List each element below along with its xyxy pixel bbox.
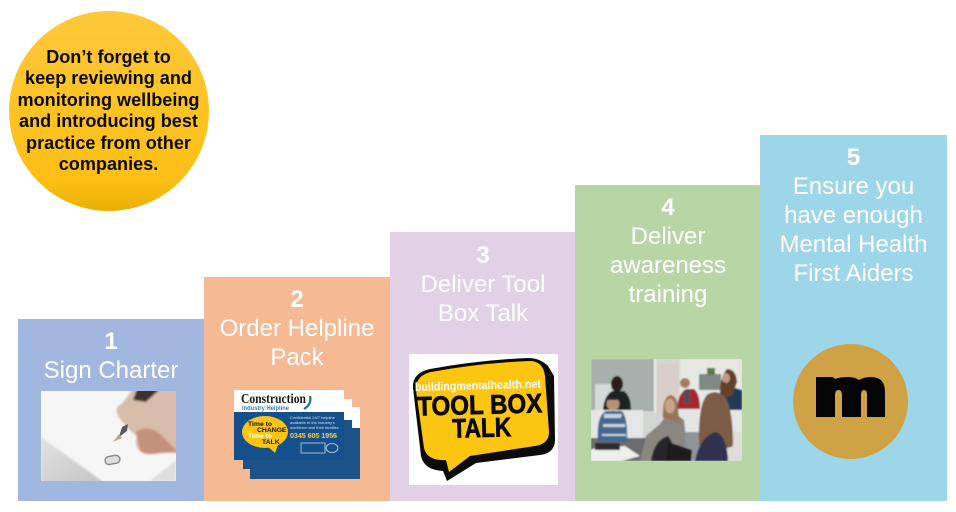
step 4 heading: Deliver bbox=[631, 223, 705, 250]
image: helpline cards: TALK bbox=[262, 439, 280, 446]
man in red bbox=[677, 389, 700, 409]
step 5 heading: have enough bbox=[784, 202, 923, 229]
woman in navy bbox=[724, 387, 742, 411]
image: helpline cards: Time to bbox=[248, 421, 272, 428]
step 5 heading: Ensure you bbox=[793, 173, 914, 200]
step 5 heading: 5 bbox=[847, 144, 860, 171]
panel: step 2 order helpline pack bbox=[204, 277, 390, 501]
step 4 heading bbox=[610, 194, 726, 308]
step 2 heading: Order Helpline bbox=[220, 315, 374, 342]
image: tool box talk speech bubble: TOOL BOX bbox=[417, 388, 543, 422]
image: helpline cards: 0345 605 1956 bbox=[290, 431, 337, 440]
step 4 heading: awareness bbox=[610, 252, 726, 279]
callout: keep reviewing circle: and introducing best bbox=[19, 111, 198, 131]
callout: keep reviewing circle: keep reviewing and bbox=[25, 68, 192, 88]
step 5 heading bbox=[779, 144, 928, 287]
woman in grey cardigan bbox=[640, 414, 685, 461]
step 1 heading: Sign Charter bbox=[44, 357, 178, 384]
step 2 heading: Pack bbox=[270, 344, 325, 371]
notebook bbox=[666, 442, 692, 461]
image: helpline cards: available to the industry's bbox=[290, 420, 335, 425]
image: tool box talk speech bubble: buildingmentalhealth.net bbox=[415, 377, 541, 394]
step 1 heading bbox=[44, 328, 178, 384]
man in plaid bbox=[598, 411, 627, 442]
image: hand signing document bbox=[41, 389, 178, 484]
step 3 heading: Deliver Tool bbox=[421, 271, 545, 298]
image: helpline cards: Industry Helpline bbox=[242, 405, 289, 412]
callout: keep reviewing circle: monitoring wellbeing bbox=[18, 90, 199, 110]
step 1 heading: 1 bbox=[104, 328, 118, 355]
step 2 heading: 2 bbox=[290, 286, 304, 313]
step 4 heading: training bbox=[629, 281, 707, 308]
callout: keep reviewing circle: Don’t forget to bbox=[46, 47, 171, 67]
callout: keep reviewing circle: companies. bbox=[59, 154, 158, 174]
step 2 heading bbox=[220, 286, 374, 371]
papers and laptop bbox=[591, 446, 640, 461]
step 3 heading: Box Talk bbox=[438, 300, 529, 327]
image: helpline cards: Construction bbox=[241, 391, 306, 406]
image: helpline cards: workforce and their families bbox=[290, 425, 339, 430]
woman with long hair bbox=[699, 392, 733, 450]
step 5 heading: Mental Health bbox=[779, 231, 928, 258]
panel: step 5 mental health first aiders bbox=[760, 135, 947, 501]
image: tool box talk speech bubble bbox=[409, 354, 558, 485]
panel: step 1 sign charter bbox=[18, 319, 204, 501]
image: helpline cards: CHANGE bbox=[257, 427, 287, 434]
step 3 heading bbox=[421, 242, 545, 327]
callout: keep reviewing circle: practice from other bbox=[26, 133, 191, 153]
step 4 heading: 4 bbox=[661, 194, 675, 221]
panel: step 3 deliver tool box talk bbox=[390, 232, 575, 501]
panel: step 4 deliver awareness training bbox=[575, 185, 760, 501]
image: group of colleagues in training bbox=[591, 359, 742, 461]
woman standing left bbox=[603, 391, 631, 410]
step 3 heading: 3 bbox=[476, 242, 490, 269]
callout: keep reviewing circle bbox=[9, 11, 209, 211]
image: helpline cards: Confidential 24/7 helpline bbox=[290, 415, 336, 420]
step 5 heading: First Aiders bbox=[793, 260, 914, 287]
image: tool box talk speech bubble: TALK bbox=[452, 412, 512, 444]
image: helpline cards: Time to bbox=[248, 433, 272, 440]
image: helpline cards bbox=[234, 390, 360, 479]
icon: gold circle m logo bbox=[793, 344, 908, 459]
